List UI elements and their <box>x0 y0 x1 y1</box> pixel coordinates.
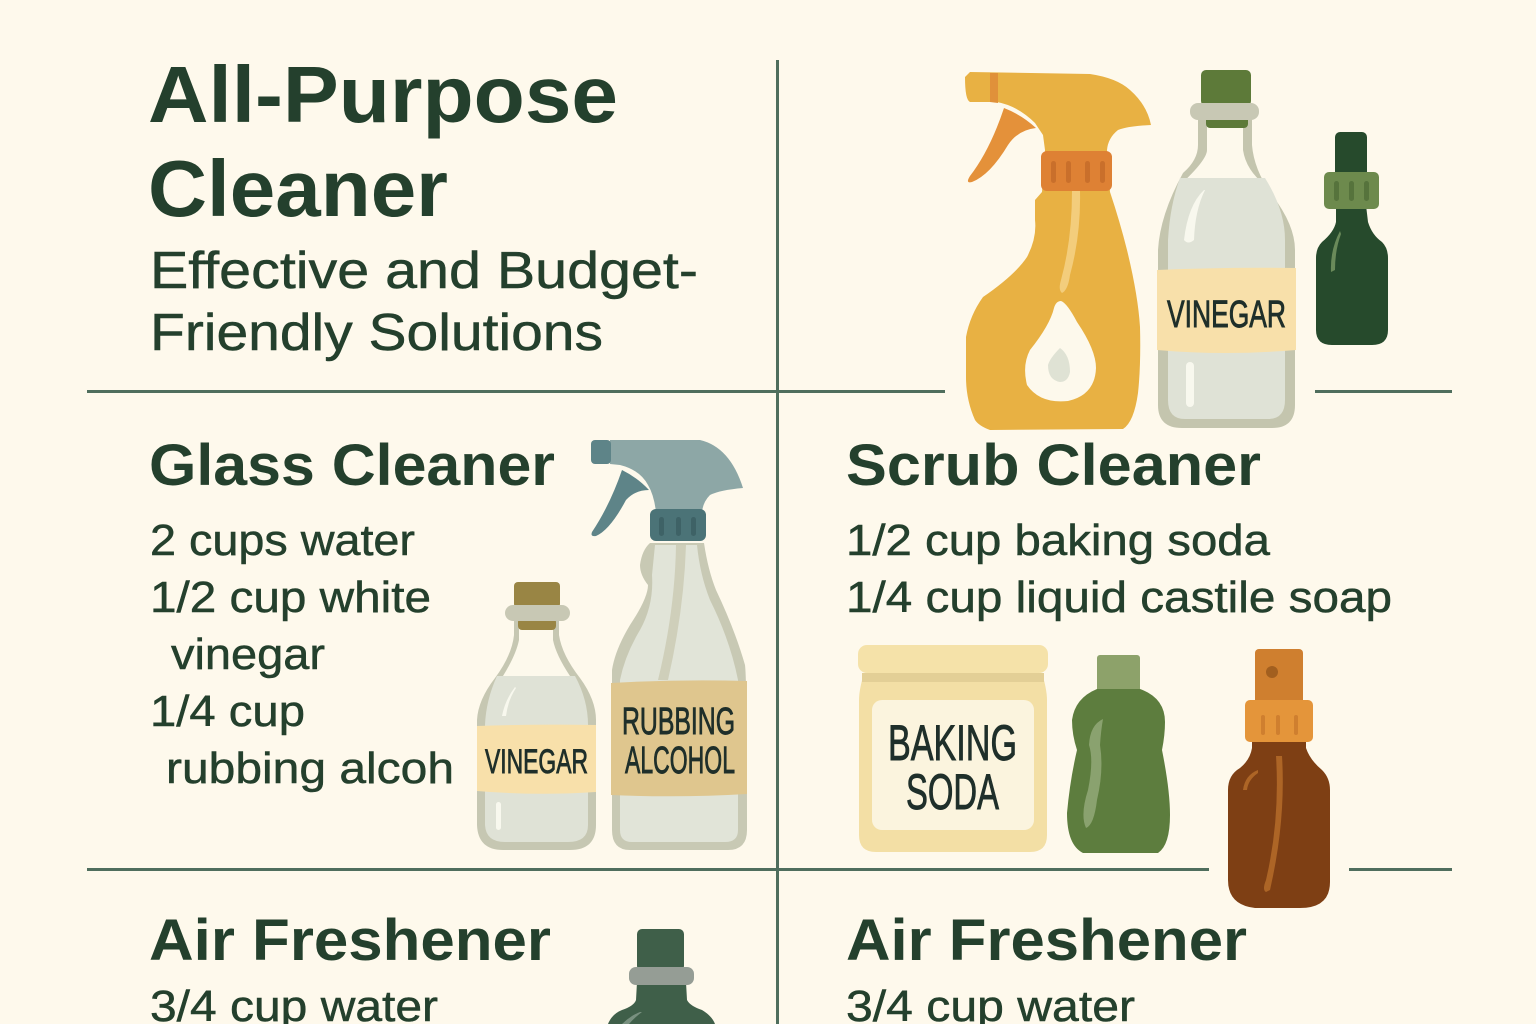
title: Cleaner <box>148 144 448 233</box>
ingredients: scrub cleaner: 1/2 cup baking soda <box>846 516 1271 565</box>
ingredients: glass cleaner <box>150 516 454 793</box>
icon: vinegar bottle: VINEGAR <box>1167 294 1286 336</box>
icon: green castile soap bottle <box>1067 655 1170 853</box>
heading: glass cleaner: Glass Cleaner <box>149 433 555 498</box>
icon: small vinegar bottle <box>477 582 596 850</box>
icon: baking soda jar <box>858 645 1048 852</box>
icon: dark green dropper bottle <box>1316 132 1388 345</box>
heading: air freshener left: Air Freshener <box>149 908 551 973</box>
title: All-Purpose <box>148 50 618 139</box>
subtitle: Effective and Budget- <box>150 242 698 300</box>
icon: blue spray bottle with rubbing alcohol: ALCOHOL <box>625 740 735 782</box>
ingredients: scrub cleaner <box>846 516 1392 622</box>
ingredients: glass cleaner: vinegar <box>171 630 325 679</box>
subtitle: Friendly Solutions <box>150 304 603 362</box>
heading: air freshener right: Air Freshener <box>846 908 1247 973</box>
icon: dark green bottle, cropped <box>608 929 715 1024</box>
ingredients: glass cleaner: 1/2 cup white <box>150 573 431 622</box>
ingredients: glass cleaner: rubbing alcoh <box>166 744 454 793</box>
section: air freshener left text <box>149 908 551 1024</box>
icon: small vinegar bottle: VINEGAR <box>485 743 588 781</box>
title <box>148 50 618 233</box>
icon: amber spray bottle <box>1228 649 1330 908</box>
ingredients: glass cleaner: 1/4 cup <box>150 687 305 736</box>
section: scrub cleaner text <box>846 433 1392 622</box>
heading block: all-purpose cleaner <box>148 50 698 362</box>
icon: yellow spray bottle <box>965 72 1151 430</box>
ingredients: glass cleaner: 2 cups water <box>150 516 415 565</box>
ingredients: scrub cleaner: 1/4 cup liquid castile soap <box>846 573 1392 622</box>
subtitle <box>150 242 698 362</box>
heading: scrub cleaner: Scrub Cleaner <box>846 433 1261 498</box>
icon: baking soda jar: SODA <box>906 764 999 820</box>
icon: blue spray bottle with rubbing alcohol: RUBBING <box>622 701 735 743</box>
icon: baking soda jar: BAKING <box>888 715 1017 771</box>
section: glass cleaner text <box>149 433 555 793</box>
icon: vinegar bottle <box>1157 70 1296 428</box>
icon: blue spray bottle with rubbing alcohol <box>591 440 747 850</box>
section: air freshener right text <box>846 908 1247 1024</box>
